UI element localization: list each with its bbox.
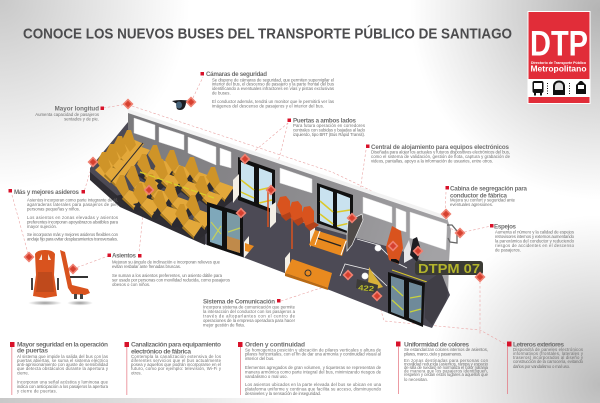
text: Cámaras de seguridad: Se dispone de cámaras de seguridad, que permiten supervigilar el [212,78,334,82]
bus illustration [90,109,483,328]
floor markings [340,239,407,286]
panel: Orden y continuidad: Orden y continuidad [245,342,305,348]
panel: Canalización: posea y aquellos que podrán incorporarse en el [131,362,221,367]
panel: Mayor seguridad: Al sistema que impide la salida del bus con las [17,354,108,359]
text: Más y mejores asideros: agarraderas laterales para pasajeros de pie, [27,202,118,207]
text: Sistema de Comunicación: mejor gestión de flota. [203,322,245,328]
text: Central de alojamiento [366,144,511,164]
icon: seat side view [60,250,93,306]
panel: Uniformidad de colores [396,342,489,394]
panel: Orden y continuidad: manera armónica como parte integral del bus, minimizando riesgos de [245,370,382,374]
text: Sistema de Comunicación: Sistema de Comunicación [203,298,275,306]
text: Central de alojamiento: videos, pantallas, apoyo a la información de usuarios, entre otros. [371,158,493,164]
panel: Orden y continuidad: interior del bus. [245,356,274,361]
icon: seat front view [28,250,62,306]
text: Cabina de segregación [446,186,528,207]
panel: Uniformidad de colores: respeten y cedan estos lugares a aquellos que [404,372,489,377]
panel: Uniformidad de colores: En zonas destinadas para personas con [404,358,489,363]
poles [268,190,292,249]
panel: Letreros exteriores: Dispondrá de paneles electrónicos [513,347,583,352]
panel: Canalización: otros. [131,370,142,376]
text: Espejos: Aumenta el número y la calidad de espejos [495,230,574,234]
bus wall [128,110,451,300]
panel: Orden y continuidad: vandalismo o mal uso. [245,374,288,379]
panel: Canalización [124,342,222,395]
text: Cámaras de seguridad: imágenes del descenso de pasajeros y el interior del bus. [212,104,324,108]
text: Puertas a ambos lados [288,118,366,137]
panel: Mayor seguridad: y cierre de puertas. [17,388,57,394]
icon: security camera [172,100,190,110]
logo: DTP Metropolitano: Directorio de Transporte Público [531,61,587,65]
text: Más y mejores asideros: Los asientos en zonas elevadas y asientos [27,215,118,220]
tiquetera box [347,214,363,251]
windows [134,118,447,250]
text: Más y mejores asideros: anclaje fijo para evitar desplazamientos transversales. [27,236,118,242]
white panels [233,174,315,276]
text: Puertas a ambos lados: centrales con subidas y bajadas al lado [293,128,366,132]
panel: Orden y continuidad: desniveles y la sensación de inseguridad. [245,391,321,396]
icon: metro [553,80,565,95]
orange platform [309,230,347,256]
text: Asientos [108,252,230,287]
panel: Uniformidad de colores: de silla de ruedas) se normaliza el color naranja [404,365,489,370]
sign: DTPM 07: DTPM 07 [418,261,480,276]
door 2 [317,183,353,235]
text: Espejos: Espejos [494,224,517,230]
text: Sistema de Comunicación: operaciones de la empresa operadora para hacer [203,318,296,323]
logo: DTP Metropolitano [528,11,590,104]
text: Asientos: ser usado por personas con movilidad reducida, como pasajeros [112,278,230,282]
driver seat [386,226,421,264]
panel: Letreros exteriores: Letreros exteriores [513,342,564,348]
rear seats bank [95,130,150,187]
marker diamonds [24,96,486,302]
icon: train [576,81,586,94]
panel: Mayor seguridad: indica con anticipación a los pasajeros la apertura [17,384,109,389]
panel: Uniformidad de colores: pilares, marco, cielo y pasamanos. [404,352,462,356]
panel: Uniformidad de colores: de manera que los pasajeros identifiquen, [404,368,488,374]
text: Cabina de segregación: conductor de fábrica [450,192,508,200]
dashed connector lines [12,77,507,345]
text: Más y mejores asideros: mayor sujeción. [27,224,57,229]
door 4 [388,270,427,327]
panel: Orden y continuidad: pilares horizontales, con el fin de dar una armonía y continuidad visual al [245,352,381,356]
panel: Mayor seguridad: de puertas [17,348,48,354]
text: Cámaras de seguridad: interior del bus, el descenso de pasajero y la parte frontal del bus [212,82,334,86]
panel: Orden y continuidad: Se homogeniza posición y ubicación de pilares verticales y altura de [245,348,382,352]
panel: Uniformidad de colores: lo necesitan. [404,377,428,382]
text: Mayor longitud [35,106,104,122]
panel: Orden y continuidad: plataforma uniforme y continua que facilita su acceso, disminuyendo [245,386,382,392]
panel: Mayor seguridad: que detecta obstáculos durante la apertura y [17,366,109,371]
panel: Letreros exteriores: traseros) incorporados al diseño y [513,355,584,360]
text: Cabina de segregación: Mejora su confort y seguridad ante [450,198,516,202]
text: Más y mejores asideros: Más y mejores asideros [14,189,80,196]
text: Puertas a ambos lados: izquierdo, tipo BRT (Bus Rápid Transit). [293,132,365,137]
text: Asientos: evitan resbalar ante frenadas bruscas. [112,264,181,269]
front dashboard [425,272,448,325]
panel: Uniformidad de colores: Se estandarizan colores internos de asientos, [404,347,488,352]
door 3 [207,202,243,257]
title: CONOCE LOS NUEVOS BUSES DEL TRANSPORTE PÚBLICO DE SANTIAGO [23,24,512,42]
text: Asientos: Se suman a los asientos preferentes, un asiento dátile para [112,273,223,278]
text: Mayor longitud: Mayor longitud [55,106,99,112]
panel: Orden y continuidad: Los asientos ubicados en la parte elevada del bus se ubican en una [245,382,382,387]
text: Central de alojamiento: como el sistema de validación, gestión de flota, captura y grabación de [371,154,511,159]
panel: Orden y continuidad: Elementos agregados de gran volumen, y tiqueteras se representan de [245,365,382,370]
sign: route number 422: 422 [358,283,375,293]
panel: Letreros exteriores: informativos (frontales, laterales y [513,351,584,356]
text: Espejos: retrovisores internos y externos aumentando [495,234,575,239]
panel: Canalización: futuro, como por ejemplo: televisión, Wi-Fi y [131,366,222,371]
text: Cámaras de seguridad: de buses. [212,90,231,96]
text: Espejos: riesgos de accidentes en el descenso [495,243,575,248]
text: Espejos: de pasajeros. [495,248,521,252]
text: Más y mejores asideros: personas pequeñas y niños. [27,206,80,212]
logo: DTP Metropolitano: Metropolitano [530,64,587,74]
panel: Canalización: diferentes servicios que el bus actualmente [131,358,222,363]
text: Asientos: obesos o con niños. [112,282,150,287]
panel: Canalización: Contempla la canalización extensiva de los [131,354,221,359]
text: Sistema de Comunicación [203,298,296,328]
panel: Uniformidad de colores: Uniformidad de colores [404,342,469,348]
text: Asientos: Asientos [112,252,137,260]
text: Sistema de Comunicación: Incorpora sistema de comunicación que permite [203,304,296,310]
panel: Mayor seguridad [10,342,109,395]
text: Puertas a ambos lados: Para futura operación en corredores [293,123,365,128]
panel: Letreros exteriores: construcción de la carrocería, evitando [513,359,584,364]
passenger seats rows [115,145,237,241]
text: Cámaras de seguridad: Cámaras de seguridad [206,71,267,78]
logo: DTP Metropolitano: DTP [530,24,588,64]
text: Espejos: la panorámica del conductor y reduciendo [495,238,575,244]
panel: Mayor seguridad: puertas abiertas, se suma el sistema eléctrico [17,358,109,363]
text: Asientos: Mejoran su ángulo de inclinación e incorporan relieves que [112,260,221,264]
panel: Letreros exteriores [507,342,584,394]
orange ramp with wheelchair sign [285,259,332,290]
bus floor [90,122,450,328]
text: Más y mejores asideros: preferentes incorporan apoyabrazos abatibles para [27,220,119,224]
text: Más y mejores asideros [8,189,119,242]
yellow seat [368,267,383,290]
panel: Canalización: electrónico de fábrica [131,348,191,356]
text: Sistema de Comunicación: la interacción del conductor con los pasajeros a [203,309,296,314]
icon: bus [532,81,544,96]
panel: Mayor seguridad: Mayor seguridad en la operación [17,342,108,348]
panel: Mayor seguridad: cierre. [17,370,29,376]
text: Espejos [490,224,575,252]
panel: Letreros exteriores: daños por vandalismo o mal uso. [513,364,570,369]
text: Central de alojamiento: Central de alojamiento para equipos electrónicos [371,144,510,151]
panel: Uniformidad de colores: movilidad reducida (asientos, rampa y espacio [404,362,489,366]
text: Sistema de Comunicación: través de altoparlantes con el centro de [203,314,296,318]
panel: Mayor seguridad: Incorporan una señal acústica y luminosa que [17,380,109,384]
text: Cámaras de seguridad: El conductor además, tendrá un monitor que le permitirá ver las [212,99,334,104]
text: Mayor longitud: Aumenta capacidad de pasajeros [35,112,99,117]
panel: Canalización: Canalización para equipamiento [131,342,221,348]
text: Cabina de segregación: eventuales agresiones. [450,202,493,207]
text: Central de alojamiento: Diseñada para alojar los actuales y futuros dispositivos electrónicos del bus, [371,150,510,154]
sign: route number 422 [356,279,378,294]
text: Más y mejores asideros: Asientos incorporan como parte integrante de él, [27,198,118,202]
door 1 [238,157,275,214]
panel: Mayor seguridad: anti-aprisionamiento con ajuste de sensibilidad [17,362,109,367]
mirror [447,225,457,243]
text: Cámaras de seguridad [200,71,334,108]
text: Cámaras de seguridad: identificando a eventuales infractores en vías y pistas exclusivas [212,86,334,91]
text: Más y mejores asideros: Se incorporan más y mejores asideros flexibles con [27,232,119,237]
text: Mayor longitud: sentados y de pie. [64,116,99,122]
text: Puertas a ambos lados: Puertas a ambos lados [293,118,357,124]
orange seats [277,196,319,231]
panel: Orden y continuidad [238,342,382,396]
text: Cabina de segregación: Cabina de segregación para [450,186,528,192]
